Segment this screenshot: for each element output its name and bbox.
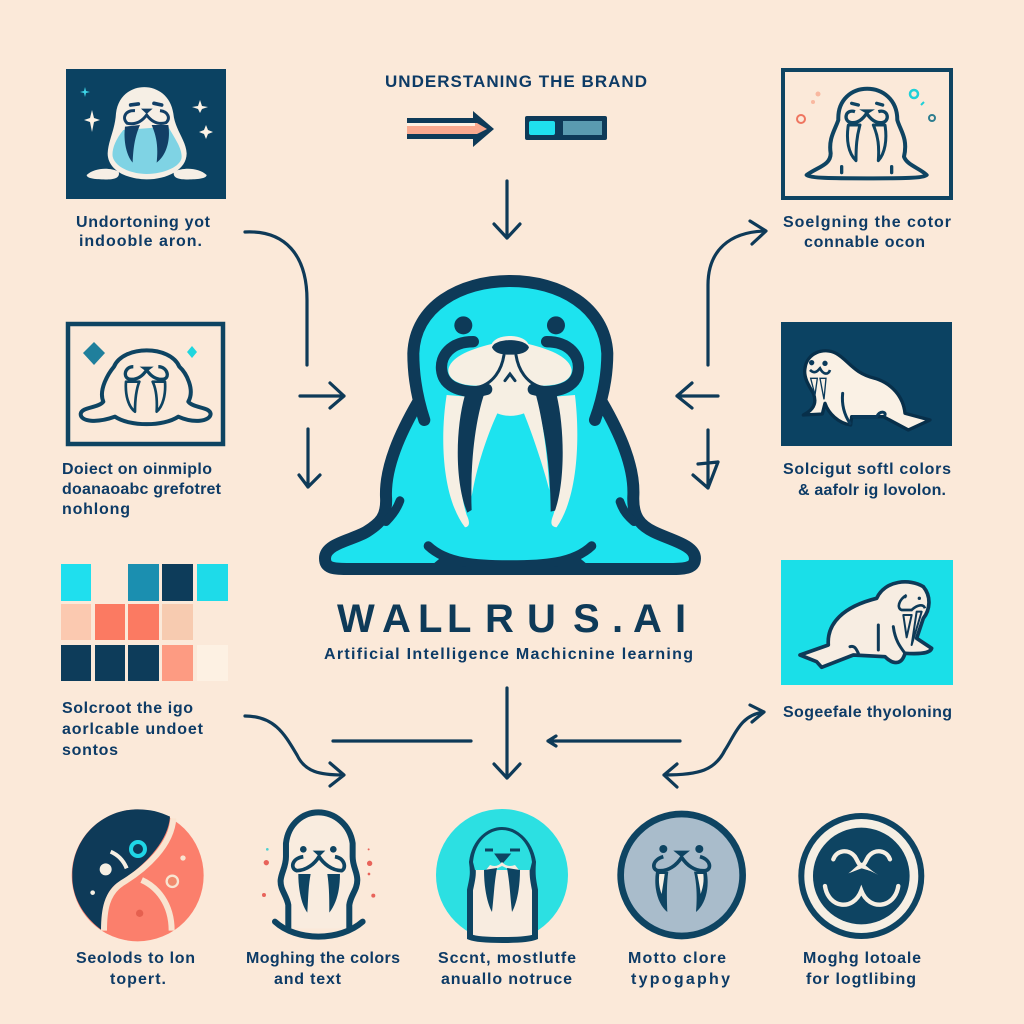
icon: ring emblem bbox=[801, 816, 921, 936]
panel: left outlined walrus bbox=[68, 324, 223, 444]
tagline: Artificial Intelligence Machicnine learning bbox=[324, 646, 693, 663]
caption: outline walrus: Moghing the colors bbox=[246, 950, 400, 967]
caption: top left bbox=[76, 214, 211, 250]
caption: yin-yang bbox=[76, 950, 195, 988]
arrow: curved top right bbox=[708, 221, 766, 365]
caption: swatches: sontos bbox=[62, 742, 118, 759]
caption: outline walrus bbox=[246, 950, 400, 988]
arrow: left to walrus bbox=[300, 383, 344, 408]
caption: ring emblem: Moghg lotoale bbox=[803, 950, 921, 967]
caption: right middle: Solcigut softl colors bbox=[783, 461, 951, 478]
arrow: curved top left bbox=[245, 232, 307, 365]
caption: top left: indooble aron. bbox=[79, 233, 202, 250]
caption: ring emblem: for logtlibing bbox=[806, 971, 916, 988]
arrow: right to walrus bbox=[677, 383, 718, 408]
caption: top right: Soelgning the cotor bbox=[783, 214, 951, 231]
caption: swatches: aorlcable undoet bbox=[62, 721, 204, 738]
main walrus: tusks bbox=[443, 350, 577, 527]
caption: cyan circle: Sccnt, mostlutfe bbox=[438, 950, 576, 967]
caption: swatches bbox=[62, 700, 204, 759]
connector: bottom left line bbox=[333, 739, 471, 743]
main walrus: muzzle bbox=[441, 316, 578, 392]
icon: progress bar bbox=[525, 116, 607, 140]
caption: right middle bbox=[783, 461, 951, 499]
panel: right dark walrus bbox=[781, 322, 952, 446]
arrow: bottom down bbox=[494, 688, 520, 778]
caption: cyan circle bbox=[438, 950, 576, 988]
caption: swatches: Solcroot the igo bbox=[62, 700, 193, 717]
icon: grey circle walrus bbox=[621, 814, 743, 936]
caption: cyan circle: anuallo notruce bbox=[441, 971, 572, 988]
caption: top right: connable ocon bbox=[804, 234, 925, 251]
caption: outline walrus: and text bbox=[274, 971, 342, 988]
caption: grey circle: typogaphy bbox=[631, 971, 730, 988]
icon: yin-yang circle bbox=[72, 809, 204, 941]
panel: top left dark walrus bbox=[66, 69, 226, 199]
caption: left middle: Doiect on oinmiplo bbox=[62, 461, 212, 478]
caption: left middle: doanaoabc grefotret bbox=[62, 481, 222, 498]
arrow: right down bbox=[693, 430, 718, 488]
panel: colour swatches bbox=[61, 564, 228, 681]
arrow: bottom left-pointing line bbox=[548, 736, 680, 746]
arrow: left down bbox=[299, 429, 320, 487]
caption: right middle: & aafolr ig lovolon. bbox=[798, 482, 946, 499]
caption: grey circle bbox=[628, 950, 730, 988]
caption: left middle: nohlong bbox=[62, 501, 130, 518]
caption: left middle bbox=[62, 461, 222, 518]
title: UNDERSTANING THE BRAND bbox=[385, 72, 647, 91]
main walrus logo bbox=[325, 281, 695, 569]
panel: top right outlined walrus bbox=[783, 70, 951, 198]
caption: top left: Undortoning yot bbox=[76, 214, 211, 231]
arrow: curved bottom right bbox=[664, 705, 764, 787]
caption: right cyan: Sogeefale thyoloning bbox=[783, 704, 952, 721]
icon: cyan circle walrus bbox=[436, 809, 568, 941]
caption: grey circle: Motto clore bbox=[628, 950, 726, 967]
caption: ring emblem bbox=[803, 950, 921, 988]
panel: right cyan walrus bbox=[781, 560, 953, 685]
caption: top right bbox=[783, 214, 951, 251]
caption: yin-yang: topert. bbox=[110, 971, 166, 988]
arrow: curved bottom left bbox=[245, 716, 344, 786]
caption: yin-yang: Seolods to lon bbox=[76, 950, 195, 967]
icon: outline walrus bbox=[262, 812, 375, 937]
arrow: top down bbox=[494, 181, 520, 238]
brand name: WALLRUS.AI bbox=[337, 597, 686, 641]
icon: salmon arrow bbox=[407, 111, 494, 147]
